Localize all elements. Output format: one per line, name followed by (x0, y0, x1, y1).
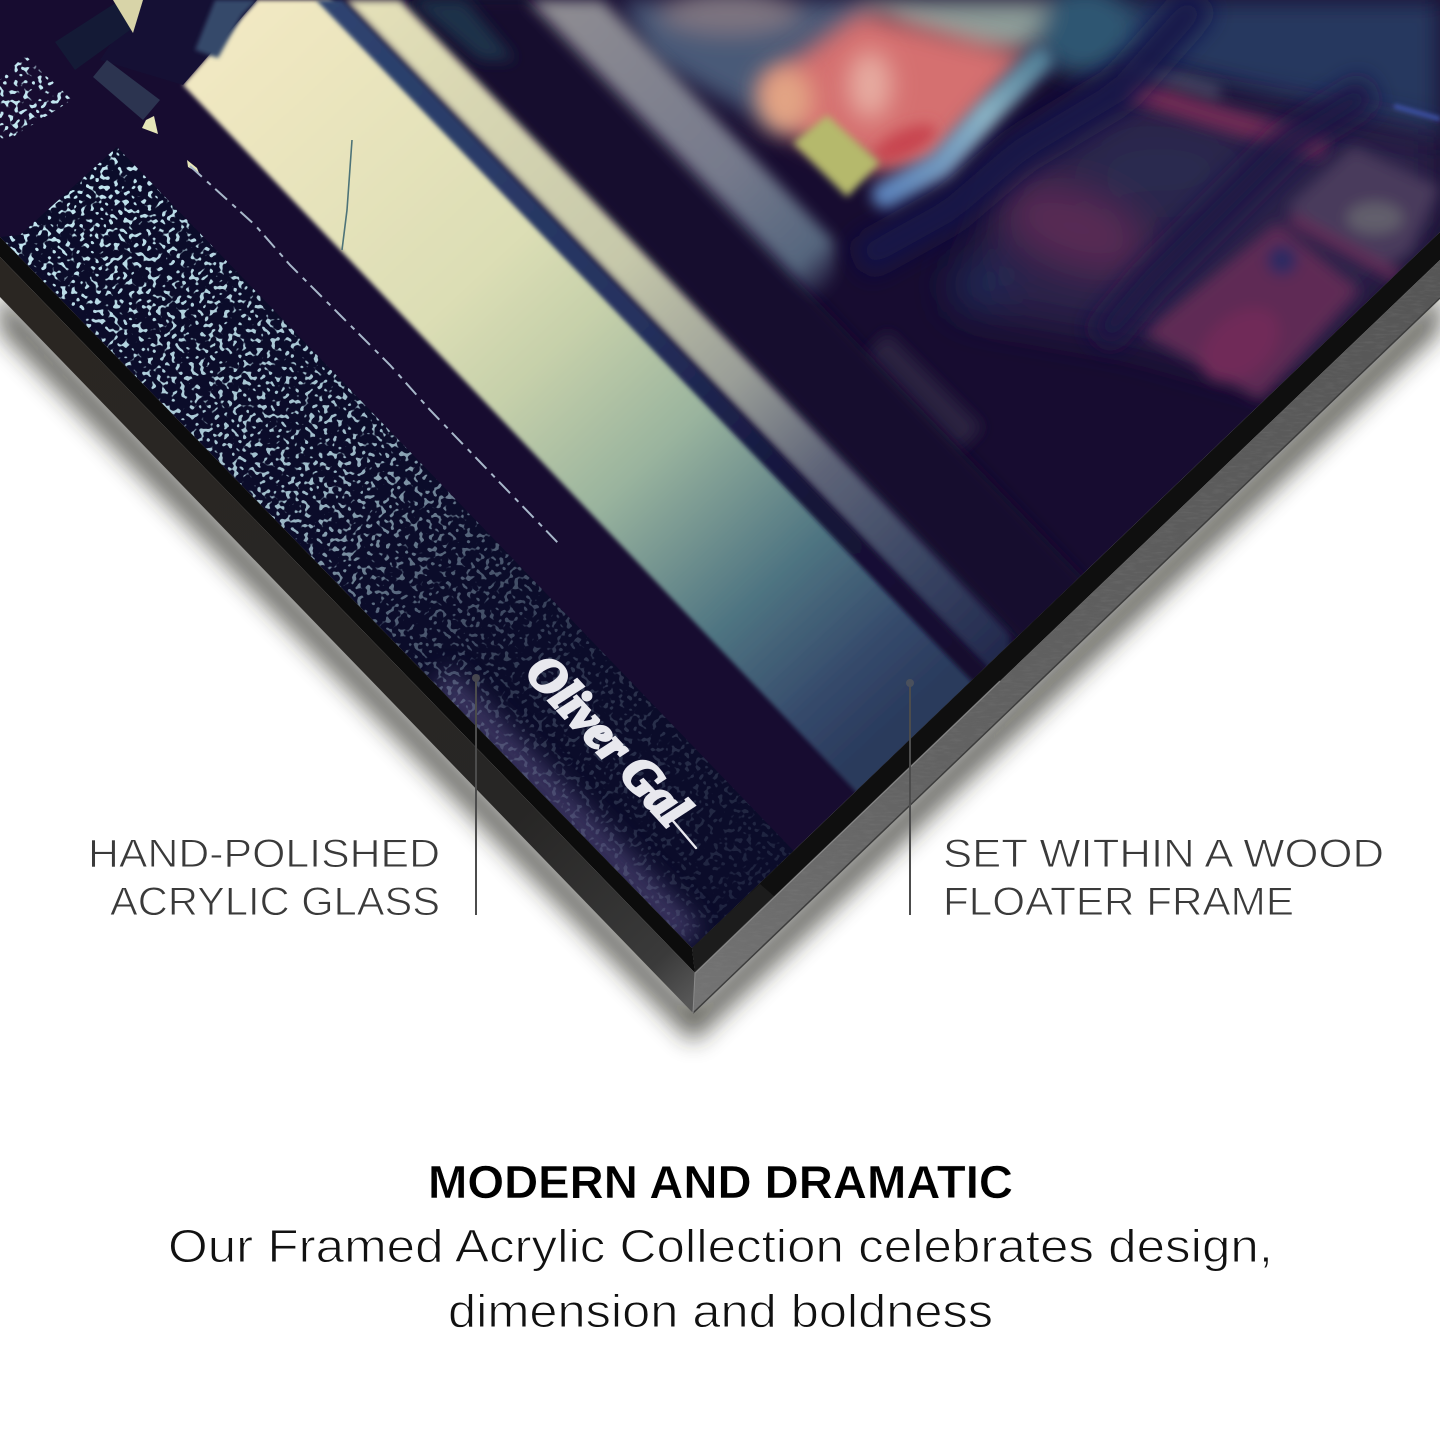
second grey strip (528, 0, 835, 319)
right purple interior (950, 85, 1440, 385)
crack in the wall (342, 140, 352, 250)
callout pointer line left (472, 674, 480, 915)
light-blue neon streak (885, 60, 1040, 195)
dark band (862, 348, 1084, 641)
callout pointer line right (906, 679, 914, 915)
dark separator (1100, 90, 1370, 340)
artwork: blurred city photograph (0, 0, 1440, 1000)
heading: MODERN AND DRAMATIC (428, 1156, 1013, 1208)
callout: hand-polished acrylic glass (88, 674, 480, 924)
dark blue stripe (316, 0, 1010, 721)
teal reflection in dark band (410, 0, 515, 60)
description text: dimension and boldness (448, 1285, 993, 1337)
pink neon sign (757, 0, 1200, 260)
callout text right: FLOATER FRAME (943, 880, 1294, 924)
callout text right (943, 832, 1384, 924)
frame: black inner rim (0, 232, 1440, 973)
red stripe (1125, 66, 1325, 148)
top-left building silhouette (55, 0, 257, 173)
cream wall band (180, 0, 976, 792)
pale strip beside wall (345, 0, 1010, 691)
upper speckled patch (0, 57, 70, 139)
kerb highlight streak (190, 166, 560, 545)
speckled pavement texture (6, 148, 790, 942)
speckled pavement base (0, 147, 810, 948)
signature: Oliver Gal (516, 643, 702, 837)
lower right picture blocks (875, 147, 1440, 440)
callout text right: SET WITHIN A WOOD (943, 832, 1384, 876)
callout text left: HAND-POLISHED (88, 832, 440, 876)
blue highlight at top right (1394, 106, 1440, 119)
callout: wood floater frame (906, 679, 1384, 924)
yellow-green panel (793, 115, 880, 197)
frame: side faces (0, 200, 1440, 1020)
drop shadow beneath frame (0, 290, 1440, 1042)
top-right navy wall (620, 0, 1440, 140)
callout text left (88, 832, 440, 924)
callout text left: ACRYLIC GLASS (110, 880, 440, 924)
purple haze near edge (440, 680, 690, 938)
framed acrylic artwork (0, 0, 1440, 1020)
description text: Our Framed Acrylic Collection celebrates design, (168, 1220, 1273, 1272)
description text (168, 1220, 1273, 1337)
